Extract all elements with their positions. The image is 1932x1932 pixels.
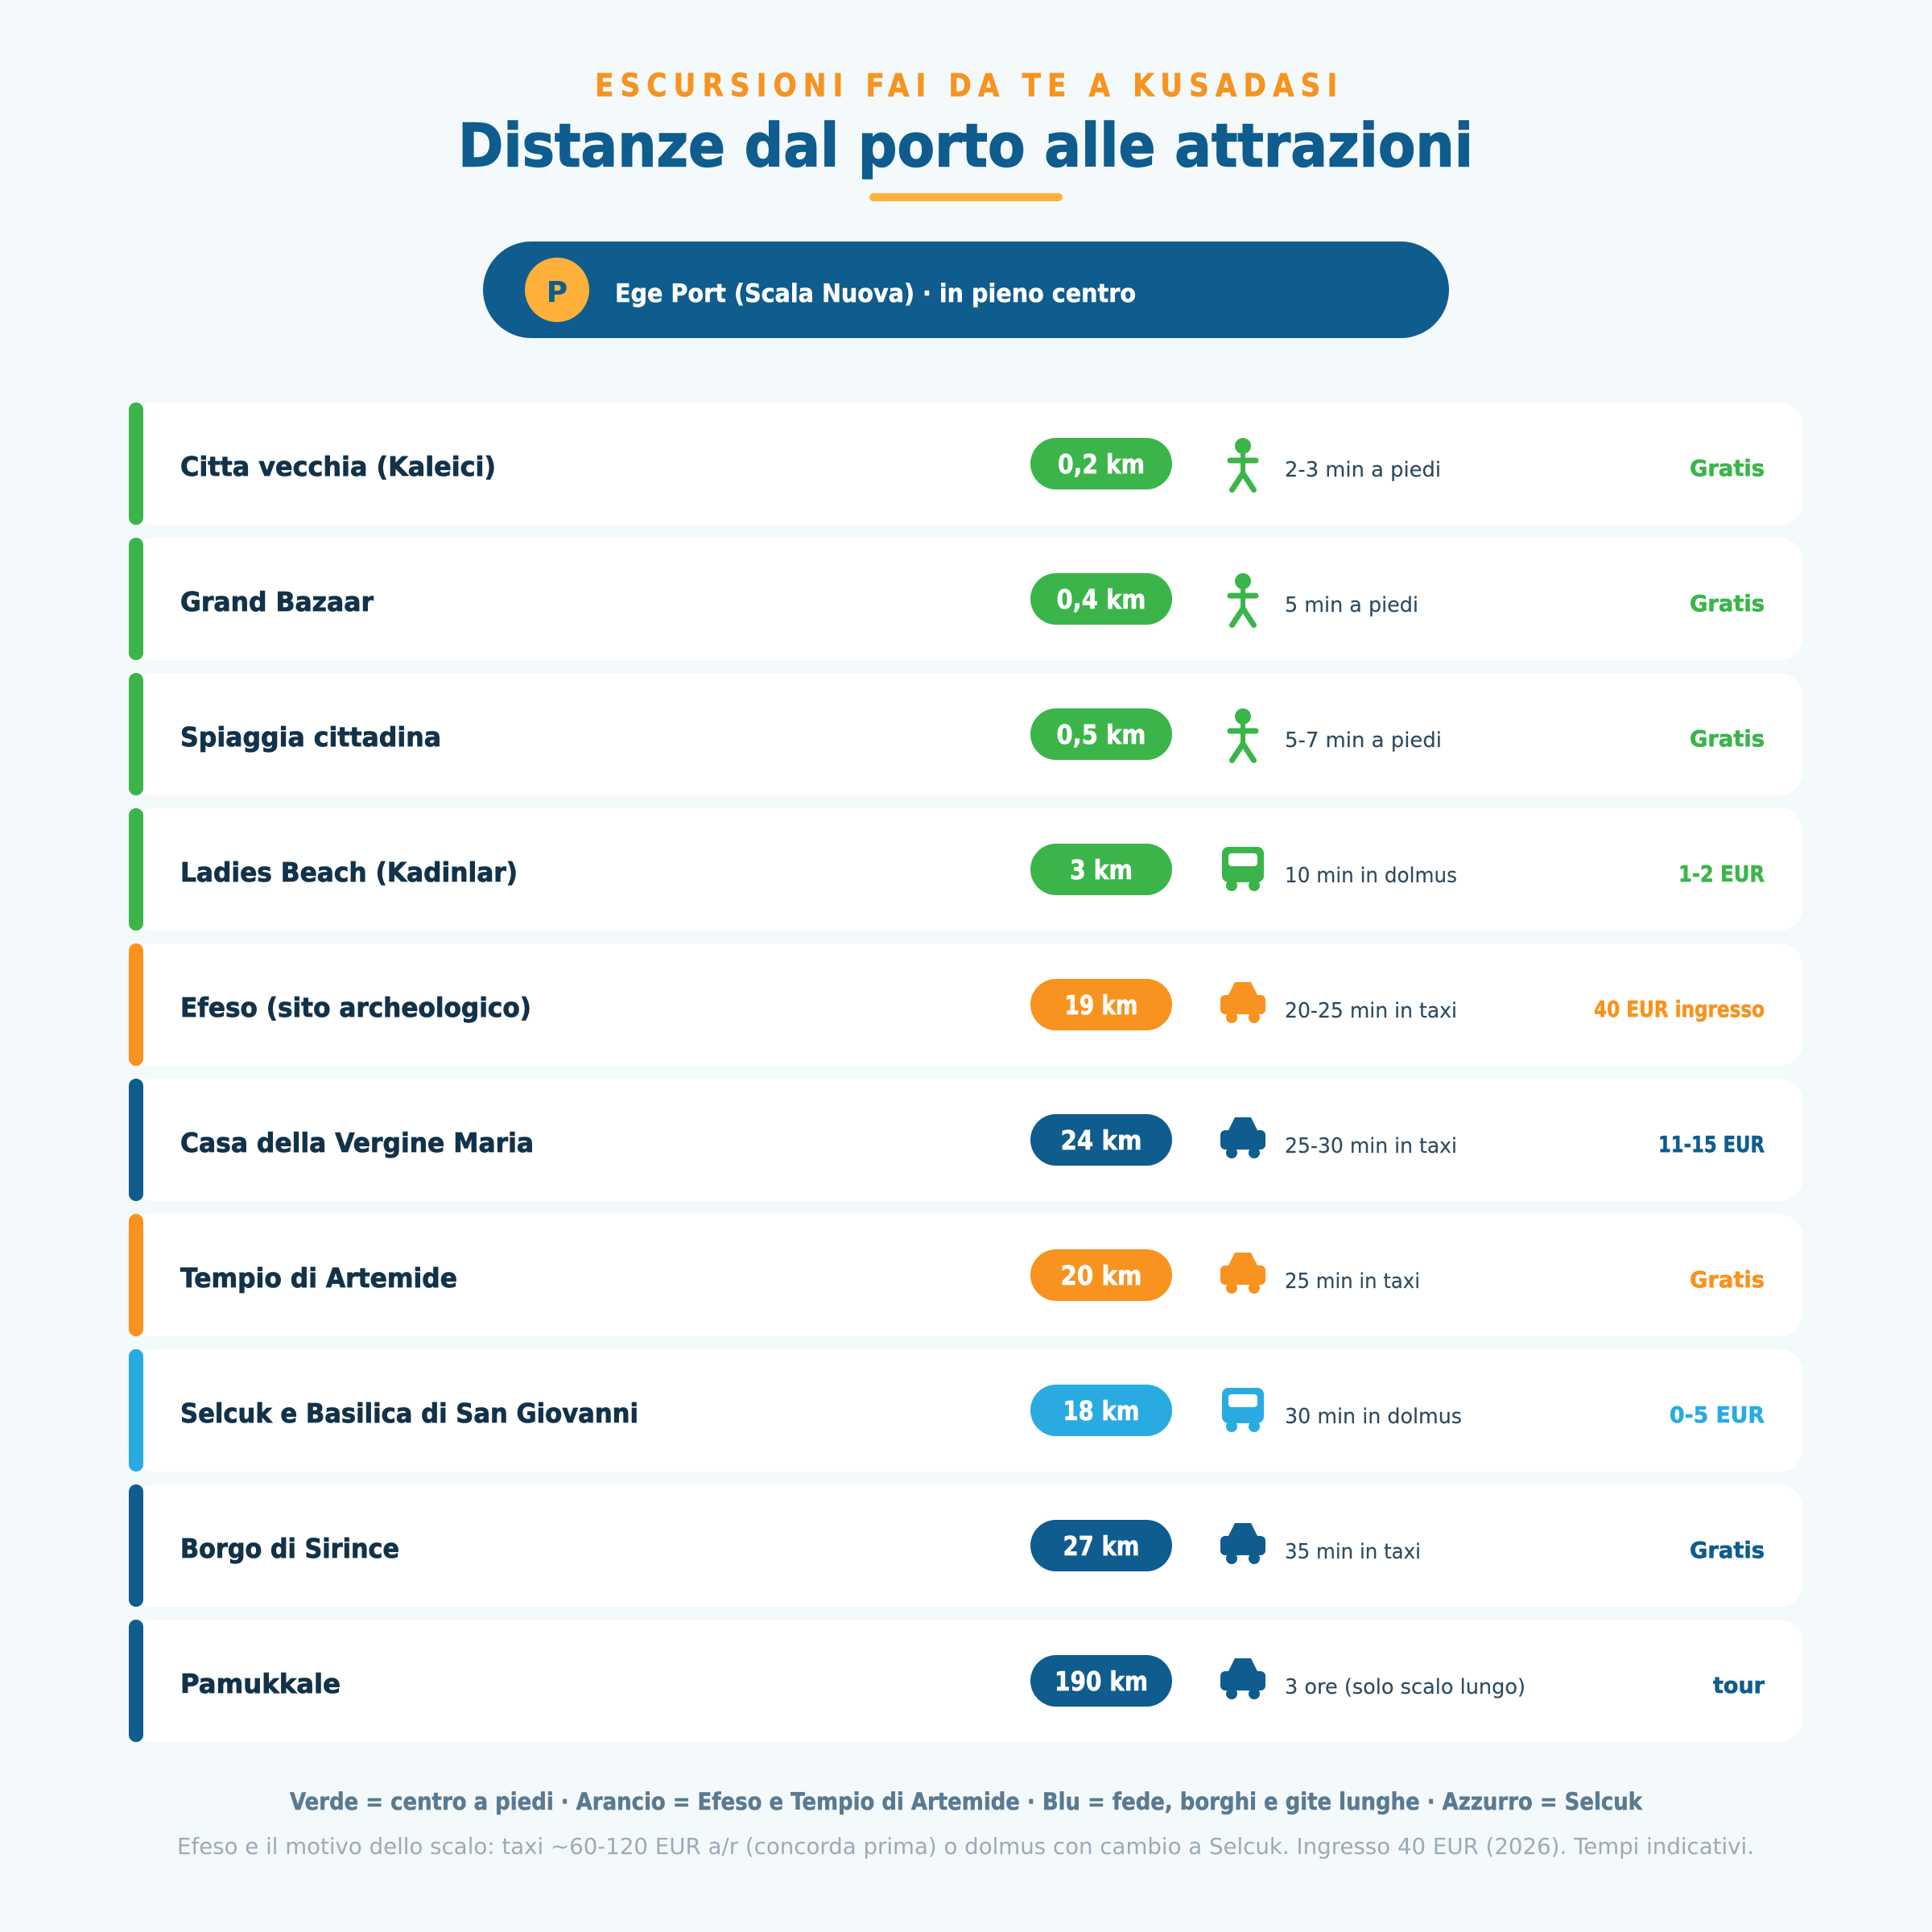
footnote: Efeso e il motivo dello scalo: taxi ~60-120 EUR a/r (concorda prima) o dolmus con cambio a Selcuk. Ingresso 40 EUR (2026). Tempi indicativi. — [177, 1833, 1754, 1860]
card — [129, 1079, 1803, 1201]
distance pill: 0,2 km — [1058, 448, 1145, 480]
distance pill: 27 km — [1063, 1530, 1140, 1562]
card — [129, 943, 1803, 1066]
price: 40 EUR ingresso — [1594, 996, 1765, 1022]
price: 1-2 EUR — [1678, 861, 1765, 887]
title underline — [869, 193, 1063, 201]
distance pill — [1030, 1114, 1172, 1166]
distance pill: 0,4 km — [1056, 584, 1146, 615]
icon: walking person — [1230, 708, 1256, 760]
icon: port P badge — [525, 258, 589, 322]
title: Distanze dal porto alle attrazioni — [458, 111, 1473, 180]
travel time: 2-3 min a piedi — [1285, 458, 1441, 482]
accent bar — [129, 538, 143, 660]
travel time: 30 min in dolmus — [1285, 1405, 1462, 1429]
attraction name: Borgo di Sirince — [180, 1533, 399, 1564]
accent bar — [129, 943, 143, 1066]
icon: minibus — [1222, 1388, 1264, 1432]
icon: walking person — [1230, 438, 1256, 489]
travel time: 5-7 min a piedi — [1285, 729, 1442, 753]
icon: taxi — [1220, 1658, 1265, 1699]
distance pill — [1030, 708, 1172, 760]
row: Pamukkale — [129, 1620, 1803, 1742]
price: Gratis — [1690, 1266, 1765, 1293]
attraction name: Ladies Beach (Kadinlar) — [180, 857, 518, 888]
accent bar — [129, 1079, 143, 1201]
accent bar — [129, 1349, 143, 1472]
row: Tempio di Artemide — [129, 1214, 1803, 1336]
accent bar — [129, 1620, 143, 1742]
distance pill: 18 km — [1063, 1395, 1140, 1426]
accent bar — [129, 1214, 143, 1336]
travel time: 25-30 min in taxi — [1285, 1134, 1457, 1158]
card — [129, 1349, 1803, 1472]
legend note: Verde = centro a piedi · Arancio = Efeso e Tempio di Artemide · Blu = fede, borghi e gite lunghe · Azzurro = Selcuk — [290, 1788, 1643, 1815]
distance pill — [1030, 844, 1172, 895]
eyebrow heading: ESCURSIONI FAI DA TE A KUSADASI — [595, 67, 1337, 104]
row: Grand Bazaar — [129, 538, 1803, 660]
price: 0-5 EUR — [1670, 1402, 1765, 1428]
row: Spiaggia cittadina — [129, 673, 1803, 795]
travel time: 10 min in dolmus — [1285, 864, 1457, 888]
card — [129, 808, 1803, 931]
attraction name: Spiaggia cittadina — [180, 721, 441, 753]
travel time: 5 min a piedi — [1285, 593, 1418, 617]
row: Citta vecchia — [129, 402, 1803, 525]
accent bar — [129, 402, 143, 525]
price: 11-15 EUR — [1658, 1131, 1765, 1158]
distance pill: 20 km — [1061, 1260, 1141, 1291]
travel time: 3 ore (solo scalo lungo) — [1285, 1675, 1525, 1699]
card — [129, 673, 1803, 795]
travel time: 25 min in taxi — [1285, 1269, 1420, 1294]
distance pill — [1030, 438, 1172, 489]
attraction name: Pamukkale — [180, 1668, 341, 1699]
attraction name: Citta vecchia (Kaleici) — [180, 451, 496, 482]
accent bar — [129, 673, 143, 795]
travel time: 35 min in taxi — [1285, 1540, 1421, 1564]
icon: taxi — [1220, 982, 1265, 1023]
price: Gratis — [1690, 590, 1765, 617]
icon: minibus — [1222, 847, 1264, 891]
icon: taxi — [1220, 1117, 1265, 1158]
distance pill — [1030, 1655, 1172, 1707]
distance pill — [1030, 1249, 1172, 1301]
banner text: Ege Port (Scala Nuova) · in pieno centro — [615, 279, 1136, 308]
icon: taxi — [1220, 1253, 1265, 1294]
accent bar — [129, 1484, 143, 1607]
attraction name: Casa della Vergine Maria — [180, 1127, 534, 1158]
price: Gratis — [1690, 455, 1765, 481]
price: Gratis — [1690, 725, 1765, 752]
row: Efeso — [129, 943, 1803, 1066]
card — [129, 402, 1803, 525]
row: Selcuk e Basilica di San Giovanni — [129, 1349, 1803, 1472]
card — [129, 538, 1803, 660]
card — [129, 1214, 1803, 1336]
price: tour — [1713, 1672, 1765, 1699]
attraction name: Grand Bazaar — [180, 586, 374, 617]
icon: port P badge: P — [547, 276, 568, 309]
distance pill — [1030, 1385, 1172, 1436]
row: Casa della Vergine Maria — [129, 1079, 1803, 1201]
attraction name: Tempio di Artemide — [180, 1262, 457, 1294]
attraction name: Efeso (sito archeologico) — [180, 992, 531, 1023]
icon: walking person — [1230, 573, 1256, 625]
travel time: 20-25 min in taxi — [1285, 999, 1457, 1023]
port banner — [483, 242, 1449, 338]
distance pill: 19 km — [1064, 989, 1138, 1021]
distance pill — [1030, 979, 1172, 1030]
distance pill: 0,5 km — [1056, 719, 1146, 750]
price: Gratis — [1690, 1537, 1765, 1563]
distance pill: 24 km — [1061, 1125, 1141, 1156]
row: Borgo di Sirince — [129, 1484, 1803, 1607]
distance pill: 3 km — [1070, 854, 1133, 886]
distance pill: 190 km — [1055, 1666, 1148, 1697]
card — [129, 1620, 1803, 1742]
accent bar — [129, 808, 143, 931]
icon: taxi — [1220, 1523, 1265, 1564]
banner pill — [483, 242, 1449, 338]
card — [129, 1484, 1803, 1607]
row: Ladies Beach — [129, 808, 1803, 931]
attraction name: Selcuk e Basilica di San Giovanni — [180, 1397, 638, 1429]
distance pill — [1030, 1520, 1172, 1571]
distance pill — [1030, 573, 1172, 625]
